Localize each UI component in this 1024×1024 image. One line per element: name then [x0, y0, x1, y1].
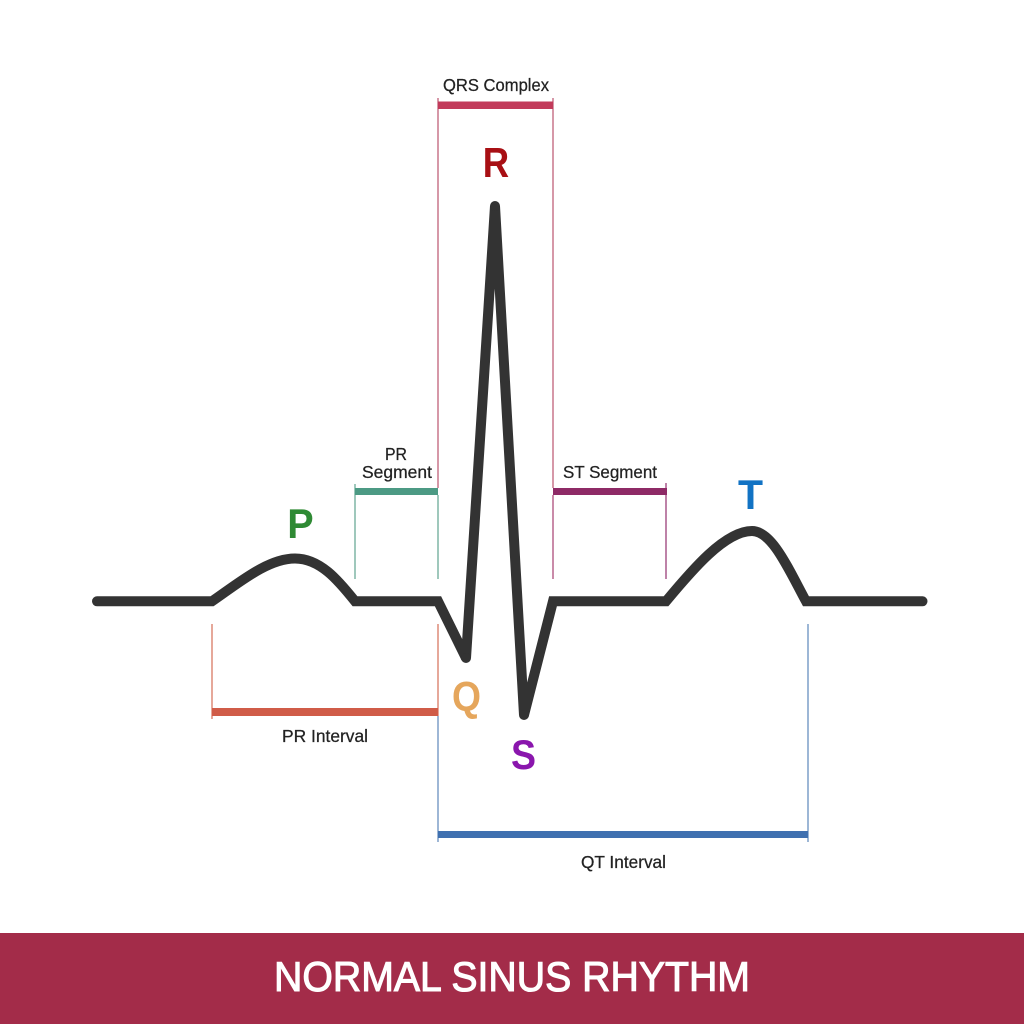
- QT interval bracket: QT Interval: [581, 852, 666, 872]
- title banner: NORMAL SINUS RHYTHM: [274, 953, 750, 1000]
- QRS complex bracket: QRS Complex: [443, 75, 549, 95]
- PR segment bracket: Segment: [362, 462, 432, 482]
- title banner: [0, 933, 1024, 1024]
- PR segment bracket: [355, 444, 438, 579]
- PR interval bracket: PR Interval: [282, 726, 368, 746]
- wave label: Q: Q: [452, 673, 481, 720]
- QRS complex bracket: [438, 75, 553, 488]
- wave label: T: T: [738, 471, 763, 518]
- wave label: S: S: [511, 731, 536, 778]
- ECG waveform: [97, 201, 922, 720]
- ST segment bracket: ST Segment: [563, 462, 657, 482]
- ST segment bracket: [553, 462, 667, 579]
- PR segment bracket: PR: [385, 444, 407, 464]
- QT interval bracket: [438, 624, 808, 872]
- wave label: P: P: [287, 500, 314, 547]
- wave label: R: R: [483, 139, 509, 186]
- PR interval bracket: [212, 624, 438, 746]
